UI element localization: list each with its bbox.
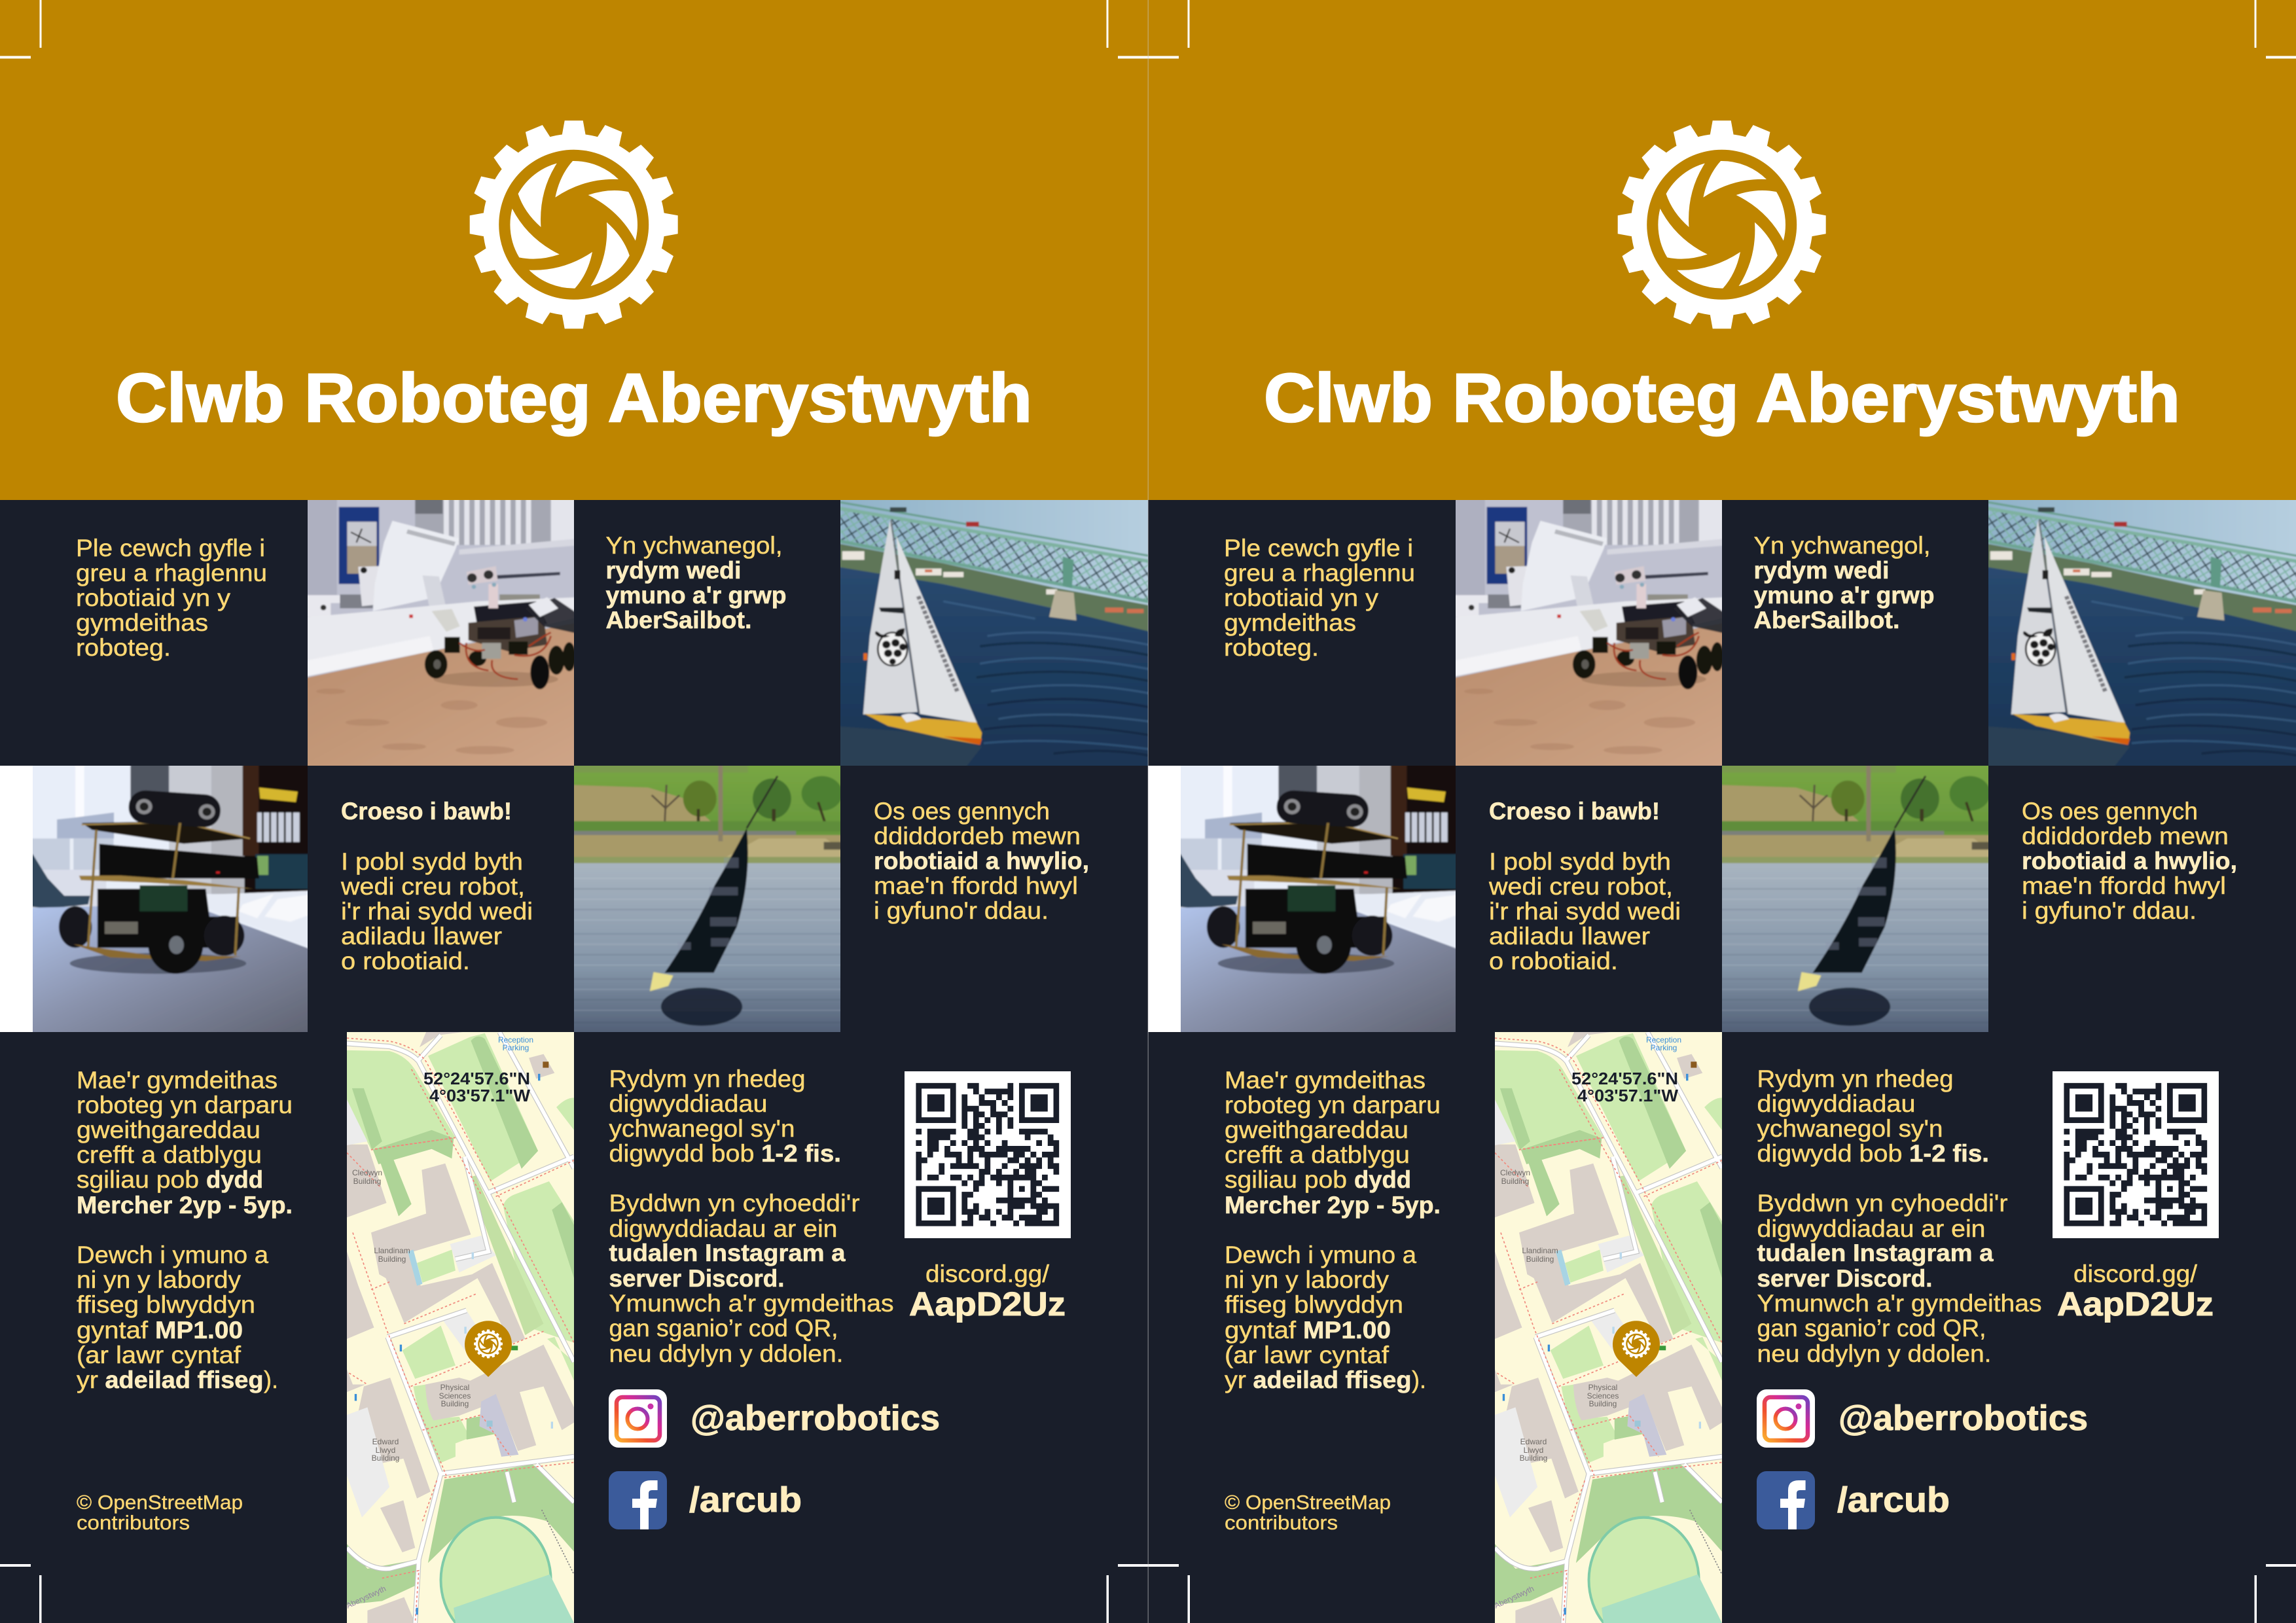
- map labels: Llwyd: [1524, 1446, 1543, 1455]
- text block: robots and sailing: ddiddordeb mewn: [2022, 823, 2229, 849]
- text block: where to build robots: roboteg.: [76, 634, 171, 661]
- map credit: contributors: [77, 1511, 190, 1534]
- text block: events: Byddwn yn cyhoeddi'r: [609, 1190, 860, 1217]
- text block: weekly sessions and location: [77, 1067, 293, 1393]
- photo: sailboat under bridge: [1981, 494, 2296, 773]
- text block: weekly sessions and location: dydd: [1354, 1166, 1411, 1193]
- text block: welcome: wedi creu robot,: [1488, 873, 1673, 900]
- text block: events: Byddwn yn cyhoeddi'r: [1757, 1190, 2008, 1217]
- map labels: Llandinam: [374, 1246, 410, 1255]
- text block: events: tudalen Instagram a: [609, 1240, 846, 1266]
- text block: AberSailbot: ymuno a'r grwp: [606, 582, 787, 609]
- text block: welcome: adiladu llawer: [341, 923, 502, 950]
- icon: map pin: [1613, 1321, 1660, 1377]
- text block: events: ychwanegol sy'n: [609, 1115, 795, 1142]
- text block: AberSailbot: rydym wedi: [1754, 557, 1889, 584]
- icon: facebook: [609, 1471, 667, 1529]
- text block: weekly sessions and location: Mae'r gymdeithas: [1225, 1067, 1426, 1094]
- text block: welcome: adiladu llawer: [1489, 923, 1650, 950]
- header band: [0, 0, 1148, 500]
- text block: welcome: [340, 798, 533, 974]
- text block: weekly sessions and location: sgiliau pob: [1225, 1166, 1347, 1193]
- map: campus street map: [1495, 1032, 1722, 1623]
- text block: events: digwyddiadau ar ein: [1757, 1215, 1986, 1242]
- map labels: Edward: [1520, 1437, 1547, 1446]
- text block: welcome: I pobl sydd byth: [1489, 848, 1671, 875]
- icon: gear logo: [1618, 120, 1826, 329]
- text block: robots and sailing: i gyfuno'r ddau.: [2022, 897, 2197, 924]
- map: campus street map: [347, 1032, 574, 1623]
- text block: weekly sessions and location: (ar lawr cyntaf: [77, 1342, 242, 1368]
- instagram handle: @aberrobotics: [1839, 1399, 2088, 1438]
- text block: weekly sessions and location: crefft a datblygu: [1225, 1141, 1410, 1168]
- discord link: [2057, 1260, 2214, 1323]
- text block: weekly sessions and location: yr: [1225, 1366, 1246, 1393]
- text block: weekly sessions and location: yr: [77, 1366, 98, 1393]
- text block: weekly sessions and location: MP1.00: [1303, 1317, 1391, 1344]
- text block: robots and sailing: Os oes gennych: [2022, 798, 2198, 825]
- map credit: contributors: [1225, 1511, 1338, 1534]
- map coordinates: 4°03'57.1"W: [1577, 1086, 1678, 1105]
- text block: weekly sessions and location: ffiseg blwyddyn: [1225, 1291, 1403, 1318]
- text block: robots and sailing: i gyfuno'r ddau.: [874, 897, 1049, 924]
- text block: where to build robots: gymdeithas: [1224, 609, 1356, 636]
- text block: weekly sessions and location: dydd: [206, 1166, 263, 1193]
- discord link: AapD2Uz: [2057, 1285, 2214, 1323]
- map labels: Building: [353, 1177, 381, 1186]
- text block: AberSailbot: [606, 532, 787, 633]
- map credit: [77, 1491, 243, 1534]
- icon: map pin: [465, 1321, 512, 1377]
- map labels: Cledwyn: [352, 1168, 382, 1177]
- text block: welcome: o robotiaid.: [1489, 948, 1618, 974]
- icon: facebook: [1757, 1471, 1815, 1529]
- map credit: [1225, 1491, 1391, 1534]
- facebook handle: /arcub: [689, 1480, 802, 1520]
- text block: AberSailbot: Yn ychwanegol,: [1754, 532, 1931, 559]
- text block: where to build robots: gymdeithas: [76, 609, 208, 636]
- photo: rover in lab: [1449, 494, 1729, 771]
- text block: events: gan sganio’r cod QR,: [1757, 1315, 1986, 1342]
- map credit: © OpenStreetMap: [1225, 1491, 1391, 1514]
- text block: events: digwydd bob: [609, 1140, 754, 1167]
- text block: where to build robots: [76, 535, 267, 661]
- photo: small wheeled robot: [26, 758, 316, 1040]
- map labels: Building: [378, 1255, 406, 1264]
- text block: robots and sailing: Os oes gennych: [874, 798, 1050, 825]
- text block: weekly sessions and location: (ar lawr cyntaf: [1225, 1342, 1390, 1368]
- QR code: [2053, 1071, 2219, 1238]
- text block: events: neu ddylyn y ddolen.: [609, 1340, 843, 1367]
- panel: right leaflet: [1148, 0, 2296, 1623]
- text block: events: digwyddiadau: [609, 1090, 767, 1117]
- instagram handle: @aberrobotics: [691, 1399, 940, 1438]
- text block: events: Rydym yn rhedeg: [609, 1065, 805, 1092]
- icon: instagram: [1757, 1389, 1815, 1448]
- text block: weekly sessions and location: MP1.00: [155, 1317, 243, 1344]
- text block: events: 1-2 fis.: [761, 1140, 841, 1167]
- facebook handle: /arcub: [1837, 1480, 1950, 1520]
- text block: AberSailbot: ymuno a'r grwp: [1754, 582, 1935, 609]
- text block: robots and sailing: [874, 798, 1089, 924]
- map labels: Sciences: [439, 1391, 471, 1400]
- text block: where to build robots: robotiaid yn y: [76, 584, 231, 611]
- text block: welcome: Croeso i bawb!: [1489, 798, 1660, 825]
- text block: weekly sessions and location: [1225, 1067, 1441, 1393]
- photo: black sail on lake: [567, 758, 848, 1039]
- text block: robots and sailing: ddiddordeb mewn: [874, 823, 1081, 849]
- map labels: Llandinam: [1522, 1246, 1558, 1255]
- map labels: [345, 1035, 533, 1611]
- panel: left leaflet: [0, 0, 1157, 1623]
- text block: events: tudalen Instagram a: [1757, 1240, 1994, 1266]
- map coordinates: [423, 1069, 530, 1105]
- map labels: Parking: [503, 1043, 529, 1052]
- map labels: Sciences: [1587, 1391, 1619, 1400]
- text block: welcome: Croeso i bawb!: [341, 798, 512, 825]
- text block: welcome: i'r rhai sydd wedi: [341, 898, 533, 925]
- text block: weekly sessions and location: Mercher 2yp - 5yp.: [1225, 1192, 1441, 1219]
- map labels: [1493, 1035, 1681, 1611]
- text block: events: [1757, 1065, 2042, 1367]
- text block: robots and sailing: mae'n ffordd hwyl: [2022, 872, 2226, 899]
- text block: AberSailbot: [1754, 532, 1935, 633]
- text block: robots and sailing: robotiaid a hwylio,: [874, 847, 1089, 874]
- text block: welcome: i'r rhai sydd wedi: [1489, 898, 1681, 925]
- text block: weekly sessions and location: Mae'r gymdeithas: [77, 1067, 278, 1094]
- text block: weekly sessions and location: sgiliau pob: [77, 1166, 199, 1193]
- text block: weekly sessions and location: adeilad ffiseg: [105, 1366, 263, 1393]
- text block: weekly sessions and location: roboteg yn darparu: [1225, 1092, 1441, 1118]
- text block: robots and sailing: [2022, 798, 2237, 924]
- map coordinates: 4°03'57.1"W: [429, 1086, 530, 1105]
- discord link: discord.gg/: [2073, 1260, 2198, 1287]
- text block: AberSailbot: Yn ychwanegol,: [606, 532, 783, 559]
- text block: weekly sessions and location: ffiseg blwyddyn: [77, 1291, 255, 1318]
- text block: AberSailbot: AberSailbot.: [1754, 607, 1899, 633]
- map labels: Reception: [498, 1035, 533, 1044]
- text block: where to build robots: greu a rhaglennu: [1224, 560, 1415, 586]
- text block: robots and sailing: robotiaid a hwylio,: [2022, 847, 2237, 874]
- text block: AberSailbot: rydym wedi: [606, 557, 741, 584]
- text block: where to build robots: Ple cewch gyfle i: [76, 535, 265, 562]
- map labels: Reception: [1646, 1035, 1681, 1044]
- text block: where to build robots: greu a rhaglennu: [76, 560, 267, 586]
- discord link: AapD2Uz: [909, 1285, 1066, 1323]
- text block: weekly sessions and location: gweithgareddau: [77, 1116, 260, 1143]
- text block: events: Ymunwch a'r gymdeithas: [1757, 1290, 2042, 1317]
- discord link: [909, 1260, 1066, 1323]
- QR code: [905, 1071, 1071, 1238]
- text block: weekly sessions and location: ni yn y labordy: [1225, 1266, 1390, 1293]
- white strip beside robot photo: [1148, 766, 1181, 1032]
- photo: small wheeled robot: [1174, 758, 1464, 1040]
- map labels: Aberystwyth: [1493, 1584, 1535, 1611]
- discord link: discord.gg/: [925, 1260, 1050, 1287]
- text block: weekly sessions and location: ).: [1412, 1366, 1426, 1393]
- text block: welcome: [1488, 798, 1681, 974]
- text block: robots and sailing: mae'n ffordd hwyl: [874, 872, 1078, 899]
- map labels: Physical: [1588, 1383, 1617, 1392]
- text block: weekly sessions and location: Mercher 2yp - 5yp.: [77, 1192, 293, 1219]
- map labels: Building: [1501, 1177, 1529, 1186]
- text block: weekly sessions and location: gyntaf: [1225, 1317, 1297, 1344]
- text block: welcome: I pobl sydd byth: [341, 848, 523, 875]
- text block: events: digwyddiadau: [1757, 1090, 1915, 1117]
- text block: events: Rydym yn rhedeg: [1757, 1065, 1953, 1092]
- text block: where to build robots: roboteg.: [1224, 634, 1319, 661]
- map labels: Aberystwyth: [345, 1584, 387, 1611]
- map credit: © OpenStreetMap: [77, 1491, 243, 1514]
- header band: [1148, 0, 2296, 500]
- text block: where to build robots: robotiaid yn y: [1224, 584, 1379, 611]
- photo: black sail on lake: [1715, 758, 1996, 1039]
- map labels: Parking: [1651, 1043, 1677, 1052]
- text block: events: ychwanegol sy'n: [1757, 1115, 1943, 1142]
- text block: events: 1-2 fis.: [1909, 1140, 1989, 1167]
- text block: welcome: wedi creu robot,: [340, 873, 525, 900]
- map labels: Building: [1520, 1454, 1547, 1463]
- text block: weekly sessions and location: Dewch i ymuno a: [1225, 1241, 1416, 1268]
- text block: events: gan sganio’r cod QR,: [609, 1315, 838, 1342]
- text block: weekly sessions and location: gweithgareddau: [1225, 1116, 1408, 1143]
- text block: events: server Discord.: [609, 1265, 784, 1292]
- text block: events: digwyddiadau ar ein: [609, 1215, 838, 1242]
- map labels: Building: [372, 1454, 399, 1463]
- text block: AberSailbot: AberSailbot.: [606, 607, 751, 633]
- text block: events: server Discord.: [1757, 1265, 1932, 1292]
- white strip beside robot photo: [0, 766, 33, 1032]
- text block: weekly sessions and location: ).: [264, 1366, 278, 1393]
- map coordinates: 52°24'57.6"N: [423, 1069, 530, 1088]
- text block: events: neu ddylyn y ddolen.: [1757, 1340, 1991, 1367]
- text block: where to build robots: Ple cewch gyfle i: [1224, 535, 1413, 562]
- text block: weekly sessions and location: roboteg yn darparu: [77, 1092, 293, 1118]
- photo: rover in lab: [301, 494, 581, 771]
- text block: welcome: o robotiaid.: [341, 948, 470, 974]
- map coordinates: 52°24'57.6"N: [1571, 1069, 1678, 1088]
- map coordinates: [1571, 1069, 1678, 1105]
- text block: weekly sessions and location: gyntaf: [77, 1317, 149, 1344]
- text block: events: [609, 1065, 894, 1367]
- photo: sailboat under bridge: [833, 494, 1157, 773]
- map labels: Edward: [372, 1437, 399, 1446]
- text block: weekly sessions and location: ni yn y labordy: [77, 1266, 242, 1293]
- text block: weekly sessions and location: adeilad ffiseg: [1253, 1366, 1411, 1393]
- map labels: Building: [1589, 1399, 1617, 1408]
- icon: instagram: [609, 1389, 667, 1448]
- map labels: Llwyd: [376, 1446, 395, 1455]
- text block: where to build robots: [1224, 535, 1415, 661]
- map labels: Cledwyn: [1500, 1168, 1530, 1177]
- text block: events: Ymunwch a'r gymdeithas: [609, 1290, 894, 1317]
- text block: events: digwydd bob: [1757, 1140, 1902, 1167]
- title: Clwb Roboteg Aberystwyth: [1264, 360, 2180, 437]
- text block: weekly sessions and location: crefft a datblygu: [77, 1141, 262, 1168]
- map labels: Building: [1526, 1255, 1554, 1264]
- text block: weekly sessions and location: Dewch i ymuno a: [77, 1241, 268, 1268]
- map labels: Physical: [440, 1383, 469, 1392]
- map labels: Building: [441, 1399, 469, 1408]
- title: Clwb Roboteg Aberystwyth: [116, 360, 1032, 437]
- icon: gear logo: [470, 120, 678, 329]
